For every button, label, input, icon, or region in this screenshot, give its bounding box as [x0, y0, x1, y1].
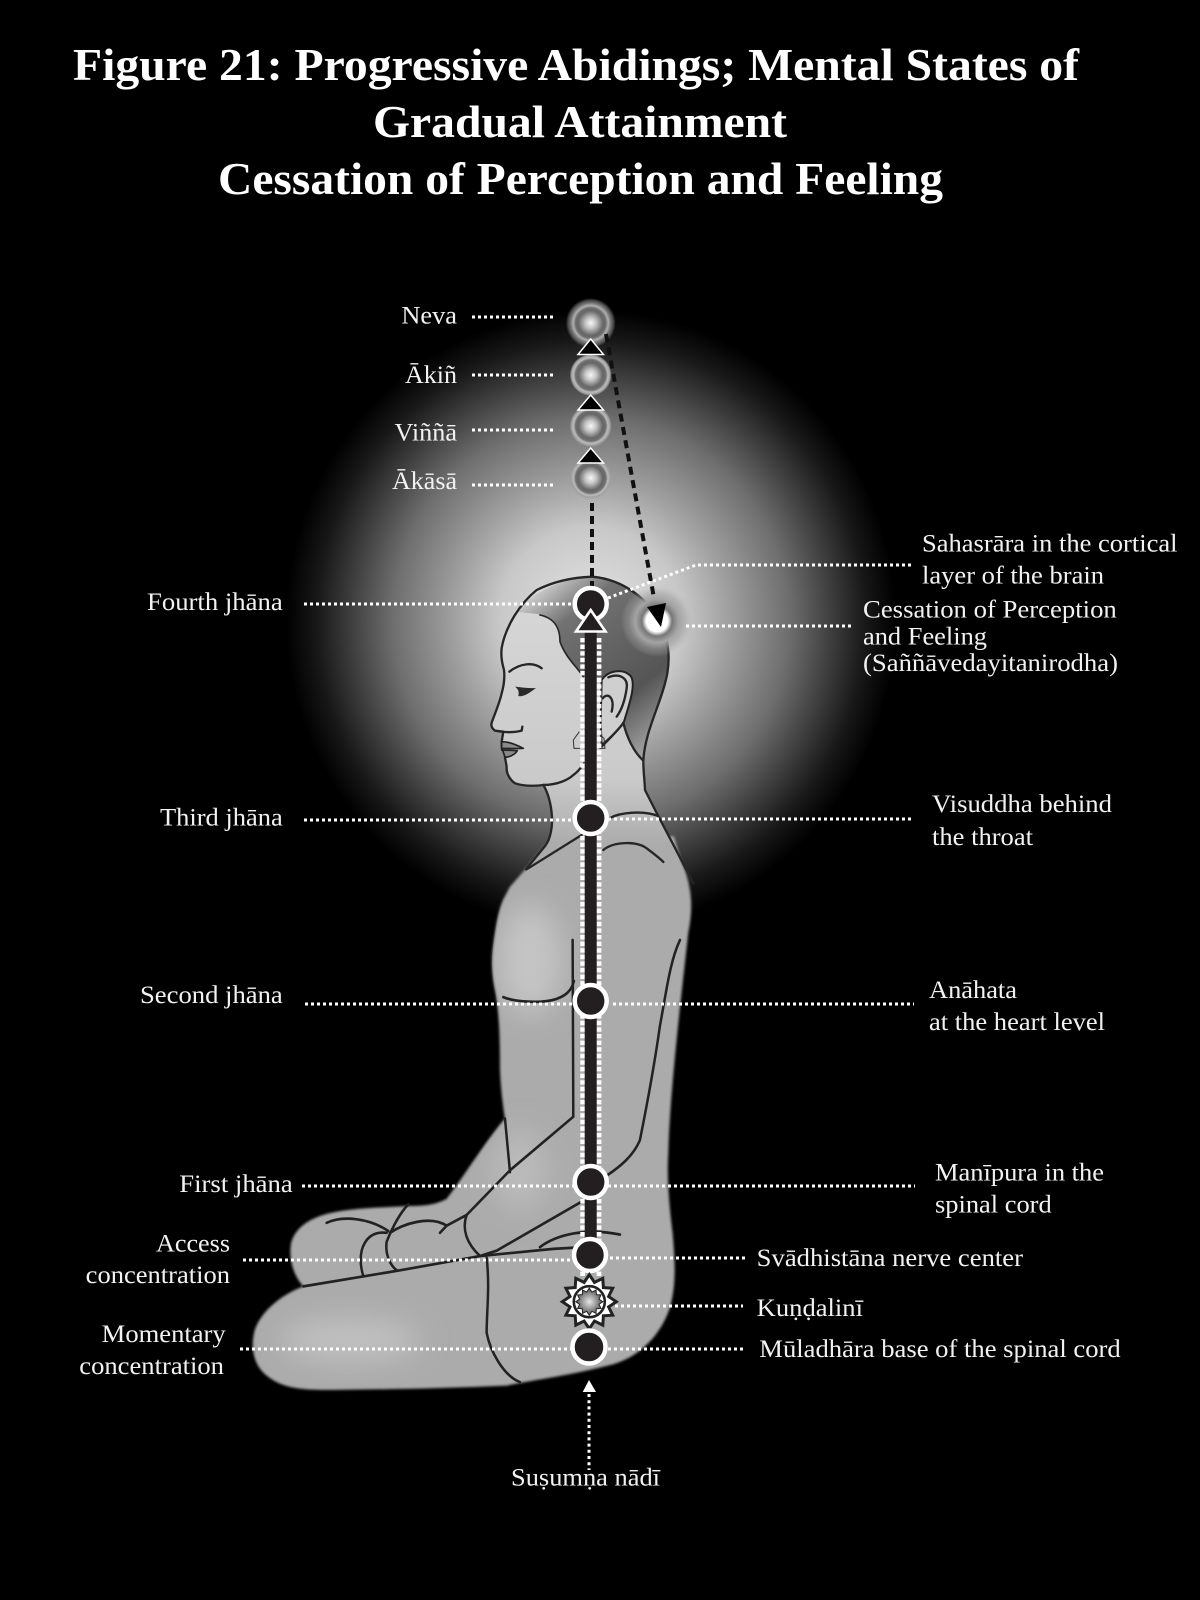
label: Akin: Ākiñ [405, 362, 458, 389]
orb: Akin [570, 354, 612, 396]
collar curve [603, 843, 663, 862]
nostril [495, 727, 522, 732]
icon: kundalini lotus star [562, 1275, 616, 1329]
horizontal dotted leader lines [240, 317, 915, 1349]
title: Figure 21: Progressive Abidings; Mental States of [73, 39, 1080, 90]
ear [601, 671, 633, 745]
jaw to ear line [602, 723, 623, 747]
label: Manipura: spinal cord [935, 1192, 1052, 1219]
label: Sahasrara: Sahasrāra in the cortical [922, 531, 1178, 558]
circle: first jhana [575, 1166, 607, 1198]
title: Cessation of Perception and Feeling [218, 153, 943, 204]
label: Momentary concentration [79, 1321, 226, 1380]
title: Gradual Attainment [373, 96, 788, 147]
central channel dotted rails [583, 638, 599, 1276]
label: Access concentration [86, 1231, 231, 1289]
central channel bar [585, 625, 597, 1250]
foot line [540, 1232, 620, 1247]
orb: Vinna [570, 405, 612, 447]
triangle two [578, 395, 604, 410]
label: Access concentration: Access [156, 1231, 230, 1258]
circle: second jhana [575, 985, 607, 1017]
label: Access concentration: concentration [86, 1262, 231, 1289]
label: Cessation [863, 597, 1118, 677]
upper lip [502, 742, 523, 749]
label: Kundalini: Kuṇḍalinī [757, 1295, 864, 1322]
label: Momentary concentration: Momentary [102, 1321, 226, 1348]
arrowhead of central channel [576, 610, 606, 632]
label: Anahata: Anāhata [929, 977, 1017, 1004]
knee arc [327, 1219, 388, 1231]
label: Manipura: Manīpura in the [935, 1160, 1104, 1187]
seated figure: body [253, 836, 691, 1390]
label: First jhana: First jhāna [179, 1171, 293, 1198]
hairline [540, 615, 583, 677]
circle: muladhara [572, 1330, 606, 1364]
head outline [491, 577, 693, 883]
hair [515, 577, 669, 761]
label: Sahasrara: layer of the brain [922, 562, 1105, 589]
eye [515, 687, 536, 696]
label: Third jhana: Third jhāna [160, 804, 283, 832]
label: Neva: Neva [401, 303, 457, 330]
clavicle line [527, 835, 582, 869]
title [73, 39, 1080, 204]
jaw line [543, 763, 584, 785]
dashed arrow: Neva to cessation [606, 334, 666, 627]
inner ear [603, 676, 627, 717]
label: Visuddha: Visuddha behind [932, 791, 1113, 818]
radial glow behind head [286, 310, 896, 930]
eyebrow [509, 664, 542, 672]
triangle three [578, 448, 604, 463]
label: Svadhistana: Svādhistāna nerve center [757, 1245, 1024, 1272]
label: Vinna: Viññā [394, 420, 457, 447]
orbs and triangles: formless abidings [566, 298, 616, 499]
label: Sahasrara [922, 531, 1178, 589]
label: Visuddha [932, 791, 1113, 851]
circle: fourth jhana [575, 588, 607, 620]
orb: Neva [566, 298, 616, 348]
label: Anahata [929, 977, 1105, 1036]
circle: third jhana [575, 802, 607, 834]
dashed arrow: Akasa to fourth jhana [590, 503, 594, 590]
label: Anahata: at the heart level [929, 1009, 1105, 1036]
back of arm and lower forearm [480, 940, 680, 1256]
chest line [503, 981, 574, 1002]
label: Cessation: and Feeling [863, 623, 988, 650]
label: Akasa: Ākāsā [392, 468, 457, 495]
orb: Akasa [570, 457, 612, 499]
leg fold [487, 1258, 520, 1382]
leg top line [303, 1247, 585, 1286]
neck back line [623, 723, 643, 761]
label: Second jhana: Second jhāna [140, 982, 283, 1009]
label: Muladhara: Mūladhāra base of the spinal cord [759, 1336, 1121, 1363]
circle: svadhistana [574, 1239, 606, 1271]
label: Fourth jhana: Fourth jhāna [147, 589, 283, 616]
lower lip [503, 750, 517, 757]
triangle one [578, 339, 604, 354]
label: Manipura [935, 1160, 1104, 1219]
label: Visuddha: the throat [932, 824, 1033, 851]
hand [361, 1204, 480, 1276]
label: Cessation: Cessation of Perception [863, 597, 1117, 624]
upper arm and forearm [440, 940, 573, 1233]
earring outline [573, 732, 605, 748]
cessation glow [621, 585, 693, 657]
label: Susumna nadi: Suṣumṇa nādī [511, 1464, 661, 1491]
seated figure: head and neck [491, 577, 693, 883]
label: Cessation: (Saññāvedayitanirodha) [863, 650, 1118, 677]
arrow: susumna nadi [583, 1380, 596, 1470]
label: Momentary concentration: concentration [79, 1353, 225, 1380]
arm front edge [505, 1119, 510, 1172]
shoulder line [610, 813, 658, 818]
